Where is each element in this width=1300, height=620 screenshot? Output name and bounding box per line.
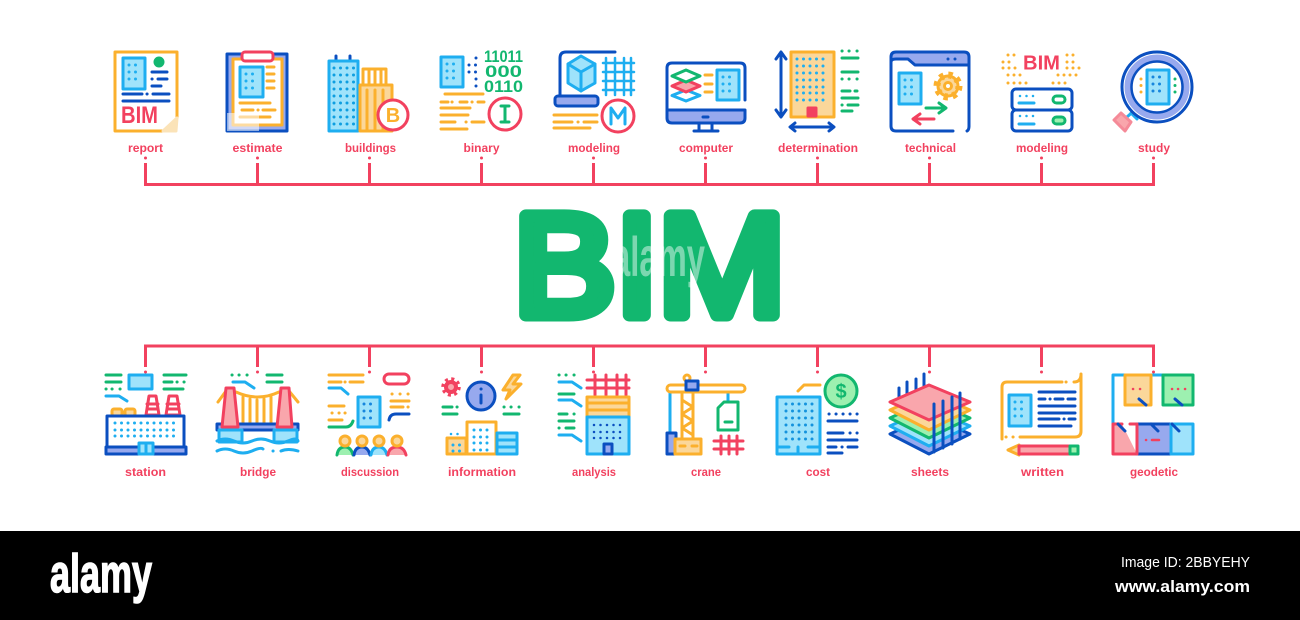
- connector dot: [256, 370, 259, 374]
- label: discussion: discussion: [341, 465, 399, 479]
- panel: study: [1114, 52, 1192, 160]
- image id: Image ID: 2BBYEHY: [1121, 554, 1250, 571]
- panel: buildings: [329, 56, 408, 160]
- panel: crane: [667, 370, 745, 479]
- icon: building analysis: [559, 375, 629, 454]
- label: crane: crane: [691, 465, 721, 479]
- icon: buildings: B: [386, 105, 400, 127]
- panel: information: [443, 370, 521, 479]
- label: geodetic: geodetic: [1130, 465, 1178, 479]
- panel: written: [1002, 370, 1081, 479]
- connector dot: [1040, 370, 1043, 374]
- icon: geodetic floor plan: [1113, 375, 1193, 454]
- connector: bottom rail: [146, 346, 1154, 367]
- icon: laptop with cube and mesh: [554, 52, 634, 132]
- connector dot: [1152, 370, 1155, 374]
- label: analysis: analysis: [572, 465, 616, 479]
- label: written: written: [1020, 465, 1064, 479]
- label: bridge: bridge: [240, 465, 276, 479]
- panel: binary: [441, 48, 523, 160]
- icon: power station: [106, 375, 186, 454]
- label: buildings: buildings: [345, 141, 396, 155]
- icon: binary data: 11011: [484, 48, 523, 66]
- icon: BIM server: BIM: [1023, 52, 1060, 74]
- icon: estimate clipboard: [227, 52, 287, 131]
- panel: technical: [891, 52, 969, 160]
- connector dot: [144, 156, 147, 160]
- connector dot: [368, 156, 371, 160]
- footer logo: alamy: [50, 544, 152, 604]
- icon: people discussing: [329, 374, 409, 455]
- connector dot: [592, 156, 595, 160]
- panel: estimate: [227, 52, 287, 160]
- panel: station: [106, 370, 186, 479]
- connector: top rail: [146, 163, 1154, 184]
- connector dot: [1152, 156, 1155, 160]
- panel: geodetic: [1113, 370, 1193, 479]
- panel: sheets: [890, 370, 970, 479]
- connector dot: [1040, 156, 1043, 160]
- icon: binary data: 000: [485, 63, 522, 81]
- connector dot: [368, 370, 371, 374]
- label: computer: computer: [679, 141, 733, 155]
- connector dot: [928, 370, 931, 374]
- connector dot: [704, 156, 707, 160]
- label: study: study: [1138, 141, 1170, 155]
- icon: building dimensions: [776, 51, 858, 131]
- icon: binary data: 0110: [484, 78, 523, 96]
- label: sheets: sheets: [911, 465, 949, 479]
- icon: written specification: [1002, 374, 1081, 455]
- label: modeling: modeling: [1016, 141, 1068, 155]
- connector dot: [144, 370, 147, 374]
- label: technical: technical: [905, 141, 956, 155]
- connector dot: [480, 370, 483, 374]
- icon: building cost: $: [835, 381, 847, 403]
- panel: analysis: [559, 370, 629, 479]
- connector dot: [480, 156, 483, 160]
- panel: cost: [777, 370, 857, 479]
- panel: bridge: [217, 370, 298, 479]
- label: report: report: [128, 141, 163, 155]
- label: station: station: [125, 465, 166, 479]
- panel: computer: [667, 63, 745, 160]
- panel: modeling server: [1003, 52, 1083, 160]
- icon: magnifying glass: [1114, 52, 1192, 131]
- icon: report document: BIM: [121, 102, 158, 129]
- icon: information buildings: [443, 375, 521, 454]
- icon: computer monitor: [667, 63, 745, 131]
- icon: stacked sheets: [890, 374, 970, 454]
- footer bar: [0, 531, 1300, 620]
- label: binary: binary: [464, 141, 500, 155]
- panel: determination: [776, 51, 858, 160]
- label: estimate: estimate: [232, 141, 283, 155]
- icon: technical window with gear: [891, 52, 969, 131]
- panel: report: [115, 52, 177, 160]
- icon: suspension bridge: [217, 375, 298, 453]
- panel: discussion: [329, 370, 409, 479]
- label: cost: cost: [806, 465, 830, 479]
- connector dot: [256, 156, 259, 160]
- icon: binary data: [441, 48, 523, 130]
- title: BIM: [514, 185, 786, 346]
- watermark: alamy: [612, 225, 705, 288]
- connector dot: [816, 156, 819, 160]
- label: modeling: modeling: [568, 141, 620, 155]
- connector dot: [592, 370, 595, 374]
- label: determination: determination: [778, 141, 858, 155]
- panel: modeling laptop: [554, 52, 634, 160]
- label: information: information: [448, 465, 516, 479]
- icon: tower crane: [667, 375, 745, 454]
- website: www.alamy.com: [1114, 577, 1250, 596]
- connector dot: [928, 156, 931, 160]
- connector dot: [704, 370, 707, 374]
- connector dot: [816, 370, 819, 374]
